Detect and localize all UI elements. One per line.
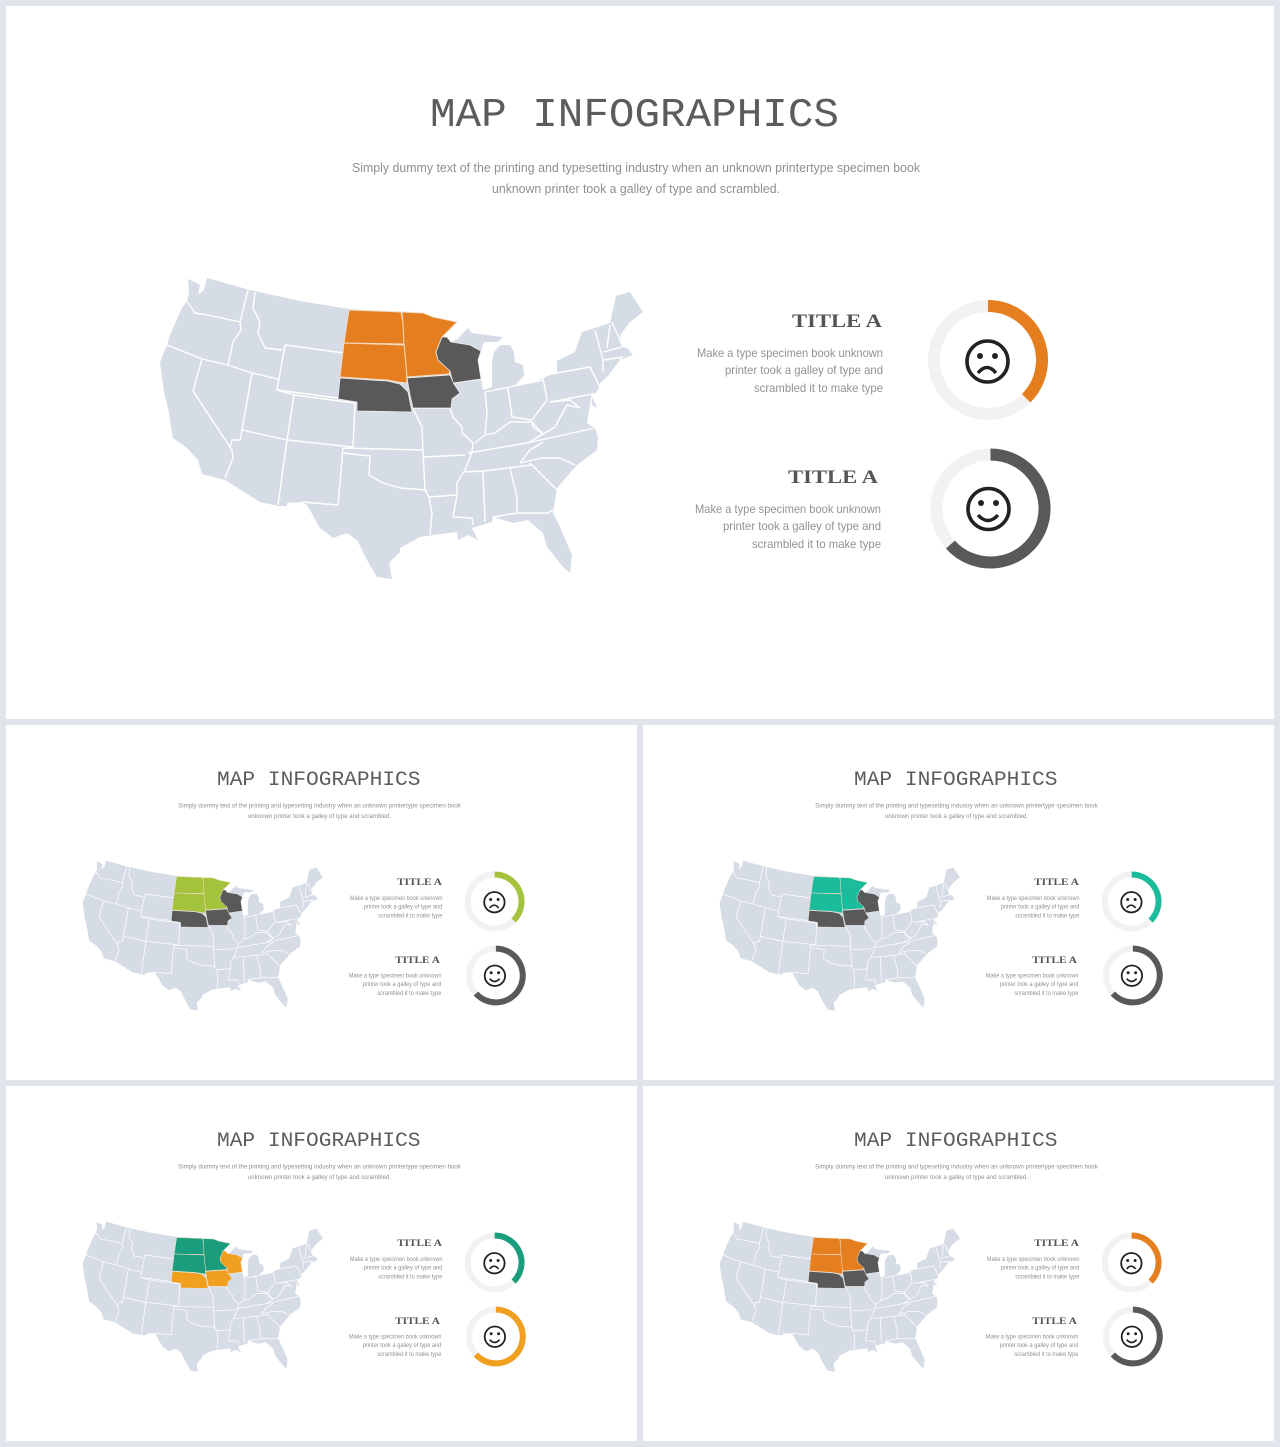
subtitle text: unknown printer took a galley of type and scrambled. [885, 1174, 1028, 1181]
text block: title A sad [350, 878, 443, 919]
text block: title A sad [350, 1239, 443, 1280]
text block: title A happy: Make a type specimen book unknown [986, 1335, 1078, 1341]
donut: orange with sad face [934, 306, 1042, 414]
text block: title A sad [697, 311, 883, 395]
text block: title A happy: printer took a galley of type and [723, 519, 881, 533]
US map with highlighted states [83, 861, 323, 1011]
text block: title A sad: printer took a galley of type and [1001, 1265, 1079, 1271]
subtitle text: Simply dummy text of the printing and typesetting industry when an unknown printertype specimen book [178, 1164, 462, 1171]
subtitle text: Simply dummy text of the printing and typesetting industry when an unknown printertype specimen book [815, 803, 1099, 810]
text block: title A happy: Make a type specimen book unknown [349, 1335, 441, 1341]
panel: lime variant [6, 725, 637, 1080]
text block: title A sad: printer took a galley of type and [364, 904, 442, 910]
panel: main slide [6, 6, 1274, 719]
subtitle text [178, 803, 462, 820]
text block: title A sad: scrambled it to make type [378, 1274, 443, 1280]
text block: title A sad: TITLE A [397, 878, 442, 888]
donut: gray with happy face [469, 949, 523, 1002]
text block: title A sad: Make a type specimen book unknown [697, 346, 883, 360]
donut: gray with happy face [1106, 1310, 1160, 1363]
text block: title A happy: TITLE A [395, 956, 440, 966]
subtitle text: unknown printer took a galley of type and scrambled. [885, 813, 1028, 820]
donut: gray with happy face [936, 454, 1045, 562]
text block: title A happy: scrambled it to make type [752, 537, 881, 551]
text block: title A happy: TITLE A [1032, 1317, 1077, 1327]
text block: title A happy: Make a type specimen book unknown [695, 502, 881, 516]
text block: title A happy: TITLE A [395, 1317, 440, 1327]
text block: title A sad: printer took a galley of type and [364, 1265, 442, 1271]
title: MAP INFOGRAPHICS [854, 769, 1058, 792]
subtitle text [815, 1164, 1099, 1181]
text block: title A happy: printer took a galley of type and [1000, 1343, 1078, 1349]
panel: orange variant [643, 1086, 1274, 1441]
text block: title A sad: TITLE A [397, 1239, 442, 1249]
text block: title A happy: printer took a galley of type and [363, 982, 441, 988]
subtitle text [178, 1164, 462, 1181]
text block: title A sad: Make a type specimen book unknown [350, 896, 442, 902]
text block: title A sad: TITLE A [792, 311, 882, 332]
text block: title A happy: scrambled it to make type [1014, 1352, 1079, 1358]
text block: title A happy [986, 956, 1079, 997]
subtitle text: unknown printer took a galley of type and scrambled. [492, 182, 780, 196]
title: MAP INFOGRAPHICS [217, 1130, 421, 1153]
text block: title A happy: TITLE A [788, 467, 878, 488]
subtitle text: Simply dummy text of the printing and typesetting industry when an unknown printertype specimen book [352, 161, 921, 175]
text block: title A sad: TITLE A [1034, 1239, 1079, 1249]
subtitle text [815, 803, 1099, 820]
donut: teal with sad face [1105, 875, 1159, 928]
text block: title A sad: Make a type specimen book unknown [987, 1257, 1079, 1263]
text block: title A sad: Make a type specimen book unknown [987, 896, 1079, 902]
text block: title A happy: scrambled it to make type [1014, 991, 1079, 997]
title: MAP INFOGRAPHICS [854, 1130, 1058, 1153]
text block: title A happy: Make a type specimen book unknown [986, 974, 1078, 980]
donut: orange with sad face [1105, 1236, 1159, 1289]
text block: title A happy [349, 956, 442, 997]
text block: title A sad: printer took a galley of type and [725, 363, 883, 377]
title: MAP INFOGRAPHICS [430, 93, 839, 139]
title: MAP INFOGRAPHICS [217, 769, 421, 792]
US map with highlighted states [720, 1222, 960, 1372]
text block: title A sad: printer took a galley of type and [1001, 904, 1079, 910]
text block: title A sad: scrambled it to make type [378, 913, 443, 919]
donut: green with sad face [468, 1236, 522, 1289]
US map with highlighted states [160, 278, 643, 579]
text block: title A sad [987, 878, 1080, 919]
text block: title A sad: scrambled it to make type [1015, 913, 1080, 919]
US map with highlighted states [83, 1222, 323, 1372]
text block: title A happy: printer took a galley of type and [1000, 982, 1078, 988]
text block: title A happy: Make a type specimen book unknown [349, 974, 441, 980]
subtitle text: Simply dummy text of the printing and typesetting industry when an unknown printertype specimen book [178, 803, 462, 810]
donut: amber with happy face [469, 1310, 523, 1363]
text block: title A happy [349, 1317, 442, 1358]
text block: title A sad: TITLE A [1034, 878, 1079, 888]
text block: title A happy: scrambled it to make type [377, 991, 442, 997]
text block: title A sad [987, 1239, 1080, 1280]
text block: title A happy [986, 1317, 1079, 1358]
subtitle text [352, 161, 921, 196]
donut: lime with sad face [468, 875, 522, 928]
subtitle text: Simply dummy text of the printing and typesetting industry when an unknown printertype specimen book [815, 1164, 1099, 1171]
subtitle text: unknown printer took a galley of type and scrambled. [248, 813, 391, 820]
text block: title A sad: scrambled it to make type [1015, 1274, 1080, 1280]
donut: gray with happy face [1106, 949, 1160, 1002]
text block: title A happy: printer took a galley of type and [363, 1343, 441, 1349]
text block: title A sad: Make a type specimen book unknown [350, 1257, 442, 1263]
panel: teal variant [643, 725, 1274, 1080]
text block: title A happy: scrambled it to make type [377, 1352, 442, 1358]
text block: title A sad: scrambled it to make type [754, 381, 883, 395]
text block: title A happy: TITLE A [1032, 956, 1077, 966]
panel: green and amber variant [6, 1086, 637, 1441]
US map with highlighted states [720, 861, 960, 1011]
subtitle text: unknown printer took a galley of type and scrambled. [248, 1174, 391, 1181]
text block: title A happy [695, 467, 881, 551]
